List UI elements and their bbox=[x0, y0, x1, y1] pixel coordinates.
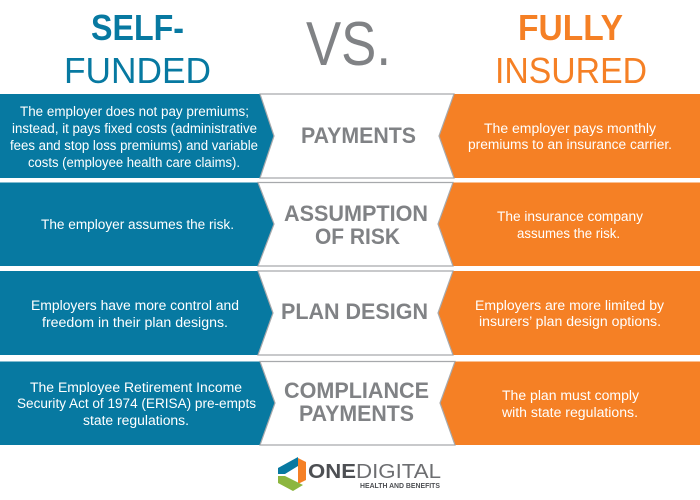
text: fully insured plan design: Employers are more limited by bbox=[475, 298, 664, 313]
heading: compliance payments bbox=[284, 378, 429, 426]
panel: self-funded plan design bbox=[0, 271, 273, 355]
text: self-funded plan design bbox=[31, 298, 239, 330]
row: plan design bbox=[0, 271, 700, 355]
heading: payments: PAYMENTS bbox=[301, 123, 416, 148]
row: compliance payments bbox=[0, 362, 700, 445]
text: self-funded plan design: freedom in their plan designs. bbox=[42, 315, 228, 330]
title: fully insured: FULLY bbox=[518, 7, 623, 48]
text: self-funded payments: The employer does not pay premiums; bbox=[20, 104, 249, 119]
text: self-funded payments: instead, it pays fixed costs (administrative bbox=[12, 121, 257, 136]
panel: fully insured payments bbox=[439, 94, 700, 178]
wordmark bbox=[308, 461, 441, 483]
text: fully insured risk bbox=[497, 209, 643, 241]
panel: self-funded risk bbox=[0, 182, 274, 266]
panel: self-funded payments bbox=[0, 94, 274, 178]
wordmark: DIGITAL bbox=[356, 461, 441, 483]
text: self-funded payments: costs (employee health care claims). bbox=[28, 155, 240, 170]
row: payments bbox=[0, 94, 700, 178]
text: fully insured risk: assumes the risk. bbox=[517, 226, 620, 241]
title: self-funded: FUNDED bbox=[64, 50, 211, 91]
title: self-funded bbox=[64, 7, 211, 91]
text: fully insured risk: The insurance company bbox=[497, 209, 643, 224]
title: versus: VS. bbox=[306, 10, 391, 79]
text: fully insured compliance: with state regulations. bbox=[501, 405, 638, 420]
text: self-funded compliance: state regulations. bbox=[83, 413, 189, 428]
panel: plan design label bbox=[258, 271, 453, 355]
text: fully insured plan design: insurers’ plan design options. bbox=[479, 314, 661, 329]
text: self-funded plan design: Employers have more control and bbox=[31, 298, 239, 313]
text: self-funded compliance: The Employee Retirement Income bbox=[30, 380, 242, 395]
panel: self-funded compliance bbox=[0, 362, 275, 445]
panel: compliance label bbox=[260, 362, 455, 445]
text: fully insured payments: The employer pays monthly bbox=[484, 121, 656, 136]
heading: assumption of risk: OF RISK bbox=[315, 224, 400, 249]
icon: hexagon bbox=[278, 457, 306, 491]
panel: fully insured compliance bbox=[440, 362, 700, 445]
panel: risk label bbox=[258, 182, 453, 266]
tagline: HEALTH AND BENEFITS bbox=[360, 481, 440, 490]
text: self-funded payments: fees and stop loss premiums) and variable bbox=[10, 138, 258, 153]
text: fully insured payments bbox=[468, 121, 672, 152]
text: self-funded compliance: Security Act of 1974 (ERISA) pre-empts bbox=[17, 396, 256, 411]
text: fully insured compliance: The plan must comply bbox=[502, 388, 639, 403]
heading: assumption of risk bbox=[284, 201, 428, 249]
heading: assumption of risk: ASSUMPTION bbox=[284, 201, 428, 226]
text: fully insured compliance bbox=[501, 388, 639, 420]
heading: plan design: PLAN DESIGN bbox=[281, 299, 428, 324]
heading: compliance payments: COMPLIANCE bbox=[284, 378, 429, 403]
text: fully insured payments: premiums to an insurance carrier. bbox=[468, 137, 672, 152]
text: self-funded risk: The employer assumes the risk. bbox=[41, 217, 234, 232]
logo: OneDigital bbox=[278, 457, 441, 491]
heading: compliance payments: PAYMENTS bbox=[299, 401, 414, 426]
panel: fully insured risk bbox=[438, 182, 700, 266]
text: self-funded compliance bbox=[17, 380, 256, 428]
text: self-funded payments bbox=[10, 104, 258, 170]
title: self-funded: SELF- bbox=[91, 7, 184, 48]
panel: fully insured plan design bbox=[438, 271, 700, 355]
panel: payments label bbox=[260, 94, 454, 178]
row: assumption of risk bbox=[0, 182, 700, 266]
wordmark: ONE bbox=[308, 461, 356, 483]
title: fully insured: INSURED bbox=[495, 50, 647, 91]
title: fully insured bbox=[495, 7, 647, 91]
text: fully insured plan design bbox=[475, 298, 664, 329]
